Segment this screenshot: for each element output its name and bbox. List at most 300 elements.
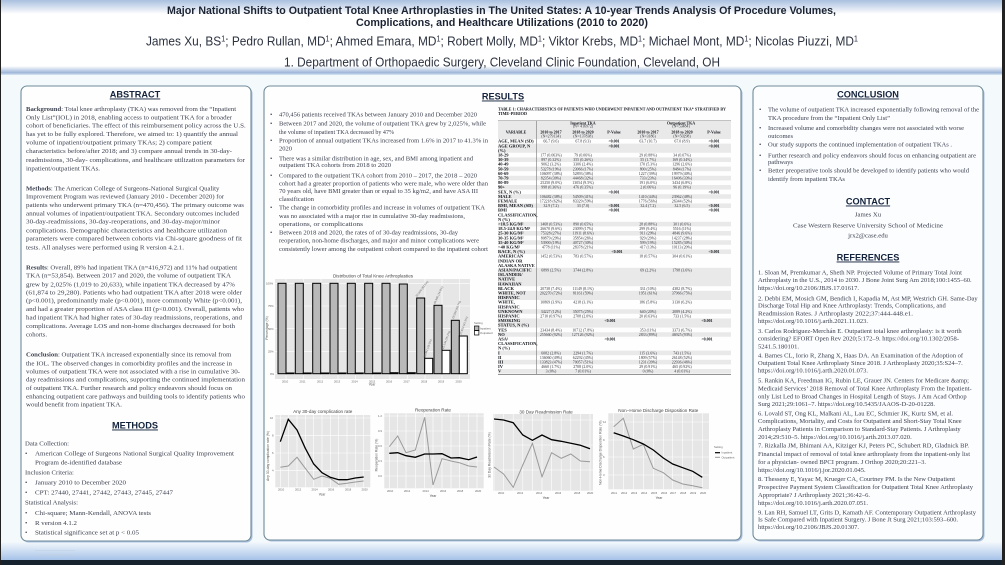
table data values: 417 (13%) bbox=[640, 246, 657, 250]
title: Major National Shifts to Outpatient Total Knee Arthroplasties in The United States: A 10-year Trends Analysis Of Procedure Volumes, bbox=[167, 5, 836, 17]
table row labels: RACE, N (%) bbox=[498, 249, 525, 254]
table data values: 133823 (47%) bbox=[540, 360, 563, 364]
panel: abstract and methods bbox=[21, 86, 252, 542]
authors: ; Pedro Rullan, MD bbox=[225, 34, 326, 48]
axis labels: 2011 bbox=[300, 380, 306, 384]
table header: P-Value bbox=[707, 130, 721, 135]
text block: methods list: • bbox=[25, 480, 27, 487]
table data values: 26670 (9.6%) bbox=[540, 227, 562, 231]
text block: methods summary: annual volumes of inpatient/outpatient TKA. Secondary outcomes included bbox=[26, 210, 240, 217]
axis labels: Year bbox=[656, 496, 663, 500]
axis labels: 2018 bbox=[421, 380, 428, 384]
axis labels: 0.9 bbox=[378, 429, 382, 433]
axis labels: 75% bbox=[268, 304, 274, 308]
table data values: 3 (0%) bbox=[546, 370, 557, 374]
text block: conclusion bullets: Our study supports the continued implementation of outpatient TKAs . bbox=[768, 142, 952, 149]
table header: (N=3186) bbox=[640, 134, 656, 138]
text block: references list: Arthroplasty in the U.S., 2014 to 2030. J Bone Joint Surg Am 2018;100:1455–60. bbox=[758, 277, 972, 284]
table row labels: III bbox=[498, 360, 504, 364]
text block: methods list: • bbox=[25, 451, 27, 458]
table data values: <0.001 bbox=[701, 318, 713, 323]
affiliation: 1. Department of Orthopaedic Surgery, Cleveland Clinic Foundation, Cleveland, OH bbox=[284, 54, 720, 70]
table data values: 83329 (59%) bbox=[573, 200, 594, 204]
text block: key results bullets: Between 2017 and 2020, the volume of outpatient TKA grew by 2,025%, while bbox=[279, 120, 486, 127]
inpatient line bbox=[494, 419, 590, 449]
table row labels: BMI bbox=[498, 208, 507, 213]
axis labels: 0.3 bbox=[378, 459, 382, 463]
table data values: 14237 (28%) bbox=[672, 236, 693, 240]
table row labels: HISPANIC bbox=[498, 314, 520, 318]
axis labels: 2017 bbox=[670, 491, 677, 495]
text block: background: inpatient/outpatient TKAs. bbox=[26, 166, 100, 173]
axis labels: 2020 bbox=[362, 488, 368, 492]
table row labels: 40-49 bbox=[498, 162, 509, 167]
table header: (N=137838) bbox=[573, 134, 593, 138]
table data values: 890 (0.65%) bbox=[573, 222, 593, 226]
axis labels: 8 bbox=[272, 434, 274, 438]
axis labels: 2013 bbox=[334, 380, 341, 384]
text block: contact details bbox=[793, 212, 943, 240]
table data values: 733 (23%) bbox=[640, 176, 657, 180]
table header: (N=50298) bbox=[673, 134, 691, 138]
table data values: 26344 (52%) bbox=[672, 200, 693, 204]
table row labels: BLACK bbox=[498, 286, 515, 291]
text block: references list: Discharge Total Hip and Knee Arthroplasty: Trends, Complications, and bbox=[758, 303, 946, 310]
axis labels: 2012 bbox=[517, 491, 524, 495]
text block: references list: Medicaid Services’ 2018 Removal of Total Knee Arthroplasty From the Inpatient- bbox=[758, 385, 972, 392]
text block: methods summary: complications. Demographic characteristics and healthcare utilization bbox=[26, 227, 228, 234]
text block: references list: 9. Lan RH, Samuel LT, Grits D, Kamath AF. Contemporary Outpatient Arthroplasty bbox=[758, 509, 977, 516]
table data values: 67.8 (9.3) bbox=[575, 140, 591, 144]
text block: methods list: • bbox=[25, 510, 27, 517]
table data values: 52893 (38%) bbox=[573, 172, 594, 176]
table data values: 106482 (38%) bbox=[540, 195, 563, 199]
table data values: 10113 (20%) bbox=[672, 246, 693, 250]
table data values: 3306 (2.4%) bbox=[573, 163, 593, 167]
inpatient line bbox=[389, 453, 477, 460]
table data values: 37966 (75%) bbox=[672, 292, 693, 296]
text block: methods list: Chi-square; Mann-Kendall, ANOVA tests bbox=[35, 510, 151, 517]
bar value labels: 20,633 (41.3%) bbox=[458, 316, 469, 335]
table data values: 136060 (49%) bbox=[540, 356, 563, 360]
text block: key results bullets: 2020 bbox=[279, 145, 293, 152]
text block: methods list bbox=[25, 440, 234, 537]
text block: conclusion bullets: identify from inpatient TKAs bbox=[768, 176, 845, 183]
text block: references list: Outpatient Total Knee Arthroplasty Since 2018. J Arthroplasty 2020;35:S24–7. bbox=[758, 360, 963, 367]
table data values: 4218 (3.1%) bbox=[573, 301, 593, 305]
axis labels: Year bbox=[430, 494, 437, 498]
text block: results summary bbox=[26, 264, 245, 339]
text block: key results bullets: 470,456 patients received TKAs between January 2010 and December 2020 bbox=[279, 111, 478, 118]
table row labels: 90+ bbox=[498, 185, 506, 190]
axis labels: 0% bbox=[270, 372, 275, 376]
table row labels: I bbox=[498, 350, 500, 355]
table row labels: N (%) bbox=[498, 346, 510, 351]
text block: methods list: January 2010 to December 2020 bbox=[35, 480, 127, 487]
table data values: 1296 (2.6%) bbox=[672, 163, 692, 167]
title: Complications, and Healthcare Utilizations (2010 to 2020) bbox=[356, 17, 648, 29]
table data values: 2708 (2.0%) bbox=[573, 365, 593, 369]
bar value labels: 44,900 (74.8%) bbox=[433, 286, 444, 305]
table data values: 32.9 (7.2) bbox=[543, 204, 559, 208]
outpatient line bbox=[280, 457, 364, 484]
line chart legend: Outpatient bbox=[722, 455, 735, 459]
table row labels: CLASSIFICATION, bbox=[498, 212, 538, 217]
table data values: <0.001 bbox=[608, 139, 620, 144]
text block: methods list: • bbox=[25, 520, 27, 527]
table row labels: STATUS, N (%) bbox=[498, 323, 529, 328]
table header: P-Value bbox=[607, 130, 621, 135]
authors: ; Nicolas Piuzzi, MD bbox=[748, 34, 854, 48]
text block: methods list: Statistical significance set at p < 0.05 bbox=[35, 530, 140, 537]
table header: 2010 to 2017 bbox=[637, 130, 659, 135]
table data values: 7 (0.01%) bbox=[575, 370, 591, 374]
table data values: 46925 (93%) bbox=[672, 333, 693, 337]
table row labels: SMOKING bbox=[498, 318, 521, 323]
text block: references list: 2. Debbi EM, Mosich GM, Bendich I, Kapadia M, Ast MP, Westrich GH. Same-Day bbox=[758, 296, 978, 303]
axis labels: Year bbox=[319, 492, 326, 496]
table row labels: IV bbox=[498, 364, 504, 369]
table data values: 733 (1.5%) bbox=[673, 314, 691, 318]
table data values: 170 (5.3%) bbox=[639, 163, 657, 167]
text block: key results bullets: classification bbox=[279, 196, 315, 203]
text block: conclusion bullets: • bbox=[759, 107, 761, 114]
table data values: 53900 (19%) bbox=[541, 241, 562, 245]
table data values: 82354 (30%) bbox=[541, 176, 562, 180]
text block: conclusion summary: day readmissions and complications, supporting the continued implementation bbox=[26, 377, 246, 384]
table data values: 1468 (0.53%) bbox=[540, 222, 562, 226]
table data values: 62292 (45%) bbox=[573, 356, 594, 360]
table data values: 2294 (1.7%) bbox=[573, 351, 593, 355]
table row labels: YES bbox=[498, 327, 507, 332]
text block: references list: 1. Sloan M, Premkumar A, Sheth NP. Projected Volume of Primary Total Joint bbox=[758, 270, 962, 276]
table data values: 75328 (27%) bbox=[541, 232, 562, 236]
table data values: 32.5 (6.5) bbox=[674, 204, 690, 208]
table data values: <0.001 bbox=[608, 208, 620, 213]
table data values: 1410 (44%) bbox=[639, 195, 658, 199]
table row labels: >40 KG/M² bbox=[498, 244, 521, 250]
text block: background: characteristics before/after 2018; and 3) compare annual trends in 30-day- bbox=[26, 148, 232, 155]
axis labels: 2014 bbox=[641, 491, 648, 495]
table data values: 4382 (8.7%) bbox=[672, 287, 692, 291]
text block: conclusion bullets bbox=[759, 107, 979, 183]
text block: methods list: • bbox=[25, 489, 27, 496]
text block: results summary: (p<0.001), predominantly male (p<0.001), more commonly White (p<0.001), bbox=[26, 298, 242, 305]
axis labels: Percentage (%) bbox=[265, 316, 269, 340]
table data values: 16406 (33%) bbox=[672, 176, 693, 180]
text block: conclusion summary: Conclusion: Outpatient TKA increased exponentially since its removal from bbox=[26, 352, 232, 359]
text block: key results bullets bbox=[270, 111, 489, 253]
table data values: <0.001 bbox=[701, 336, 713, 342]
table data values: 25250 (9.0%) bbox=[540, 181, 562, 185]
chart title: 30 Day Readmission Rate bbox=[519, 410, 573, 414]
table data values: 2833 (89%) bbox=[639, 333, 658, 337]
table data values: 127126 (92%) bbox=[572, 333, 595, 337]
table data values: 63.7 (10.7) bbox=[639, 140, 657, 144]
table data values: 3373 (6.7%) bbox=[672, 328, 692, 332]
bar value labels: 15,134 (25.2%) bbox=[441, 330, 451, 350]
authors: 1 bbox=[436, 34, 441, 44]
table data values: <0.001 bbox=[608, 189, 620, 194]
text block: methods list: Program de-identified database bbox=[35, 460, 122, 467]
authors: 1 bbox=[638, 34, 643, 44]
table data values: 35854 (26%) bbox=[573, 236, 594, 240]
axis labels: 2018 bbox=[457, 489, 464, 493]
table data values: 69 (2.2%) bbox=[640, 268, 656, 272]
table row labels: HAWAIIAN bbox=[498, 281, 522, 286]
bar chart: duration of total knee arthroplasties bbox=[265, 274, 493, 386]
table data values: 3434 (6.8%) bbox=[672, 181, 692, 185]
text block: key results bullets: • bbox=[270, 120, 272, 127]
table data values: <0.001 bbox=[708, 203, 720, 208]
text block: key results bullets: operations, or complications bbox=[279, 221, 363, 228]
axis labels: 12 bbox=[603, 420, 607, 424]
axis labels: 2014 bbox=[536, 491, 543, 495]
table data values: 2 (0.06%) bbox=[640, 186, 656, 190]
text block: conclusion summary: volumes of outpatient TKA were not associated with a rise in cumulative 30- bbox=[26, 368, 240, 375]
table row labels: (%) bbox=[498, 148, 506, 153]
axis labels: 0.6 bbox=[378, 444, 382, 448]
axis labels: 4 bbox=[272, 469, 274, 473]
axis labels: 2010 bbox=[498, 491, 505, 495]
table data values: 3744 (2.8%) bbox=[573, 268, 593, 272]
table title bbox=[498, 106, 727, 116]
table data values: 911 (29%) bbox=[640, 232, 657, 236]
text block: background bbox=[26, 106, 246, 173]
axis labels: 0.0 bbox=[378, 474, 382, 478]
table data values: 299 (9.4%) bbox=[639, 227, 657, 231]
table data values: 255660 (92%) bbox=[540, 333, 563, 337]
text block: conclusion summary bbox=[26, 352, 246, 409]
text block: conclusion bullets: • bbox=[759, 152, 761, 159]
bar chart legend: Setting bbox=[474, 321, 483, 325]
text block: contact details: Case Western Reserve University School of Medicine bbox=[793, 222, 943, 229]
table data values: 29 (0.88%) bbox=[639, 154, 657, 158]
axis labels bbox=[374, 414, 482, 498]
table header bbox=[506, 120, 721, 138]
table header: (N=279134) bbox=[541, 134, 561, 138]
table header: 2010 to 2017 bbox=[540, 130, 562, 135]
inpatient bars bbox=[278, 283, 459, 374]
text block: references list: 6. Lovald ST, Ong KL, Malkani AL, Lau EC, Schmier JK, Kurtz SM, et al. bbox=[758, 411, 953, 418]
axis labels: 1.2 bbox=[378, 414, 382, 418]
axis labels bbox=[598, 420, 707, 500]
table row labels: N (%) bbox=[498, 217, 510, 222]
table data values: 20 (0.63%) bbox=[639, 314, 657, 318]
text block: methods list: Statistical Analysis: bbox=[25, 500, 78, 507]
table data values: 11911 (8.6%) bbox=[572, 232, 594, 236]
table row labels: ALASKA NATIVE bbox=[498, 263, 535, 268]
table row labels: BMI, MEAN (SD) bbox=[498, 203, 533, 208]
axis labels bbox=[488, 432, 594, 500]
table data values: 28 (0.88%) bbox=[639, 222, 657, 226]
axis labels: 2014 bbox=[312, 488, 318, 492]
text block: results summary: cohorts. bbox=[26, 332, 47, 339]
table data values: 331 (10%) bbox=[640, 287, 657, 291]
bar chart legend bbox=[474, 321, 493, 335]
axis labels: 2012 bbox=[295, 488, 302, 492]
table data values: 22936 (46%) bbox=[672, 360, 693, 364]
text block: references list: Readmission Rates. J Arthroplasty 2022;37:444-448.e1. bbox=[758, 310, 913, 317]
text block: key results bullets: • bbox=[270, 173, 272, 180]
table data values: <0.001 bbox=[708, 208, 720, 213]
heading: results: RESULTS bbox=[482, 92, 524, 102]
text block: key results bullets: • bbox=[270, 138, 272, 145]
axis labels: 2011 bbox=[611, 491, 617, 495]
table data values: 44468 (32%) bbox=[573, 176, 594, 180]
text block: references list: considering? EFORT Open Rev 2020;5:172–9. https://doi.org/10.1302/2058- bbox=[758, 336, 959, 343]
table data values: <0.001 bbox=[708, 143, 720, 148]
text block: key results bullets: Proportion of annual outpatient TKAs increased from 1.6% in 2017 to 41.3% in bbox=[279, 138, 489, 145]
text block: conclusion bullets: • bbox=[759, 125, 761, 132]
table row labels: ASA¹ bbox=[498, 336, 509, 342]
text block: results summary: and had a greater proportion of ASA class III (p<0.001). Overall, patients who bbox=[26, 306, 245, 313]
table data values: 6899 (2.5%) bbox=[541, 268, 561, 272]
table data values: 67.0 (8.9) bbox=[674, 140, 690, 144]
table row labels: NATIVE bbox=[498, 277, 515, 282]
axis labels: 2012 bbox=[621, 491, 628, 495]
line chart: non-home discharge disposition rate bbox=[598, 408, 709, 500]
text block: references list: https://doi.org/10.2106/JBJS.20.01307. bbox=[758, 524, 859, 531]
axis labels: 2018 bbox=[680, 491, 687, 495]
text block: methods list: • bbox=[25, 530, 27, 537]
table data values: 115 (3.6%) bbox=[639, 351, 657, 355]
text block: key results bullets: • bbox=[270, 205, 272, 212]
table data values: 18 (0.57%) bbox=[639, 255, 657, 259]
bar chart legend: Outpatient bbox=[480, 331, 493, 335]
text block: conclusion bullets: The volume of outpatient TKA increased exponentially following removal of the bbox=[768, 107, 979, 114]
table data values: 998 (0.36%) bbox=[541, 186, 561, 190]
axis labels: 2010 bbox=[387, 489, 394, 493]
text block: references list: https://doi.org/10.1016/j.jor.2020.01.045. bbox=[758, 467, 866, 474]
text block: methods list: Data Collection: bbox=[25, 440, 69, 447]
line chart: reoperation rate bbox=[374, 408, 484, 498]
axis labels: 6 bbox=[603, 455, 605, 459]
table data values: 9062 (3.2%) bbox=[541, 163, 561, 167]
table data values: 304 (0.61%) bbox=[672, 255, 692, 259]
table data values: 40727 (30%) bbox=[573, 241, 594, 245]
axis labels: 2020 bbox=[475, 489, 482, 493]
table data values: 33 (7.0) bbox=[577, 204, 590, 208]
text block: references list: https://doi.org/10.1016/j.arth.2021.11.023. bbox=[758, 318, 868, 325]
axis labels: Reoperation Rate (%) bbox=[374, 439, 378, 471]
table row labels: CLASSIFICATION, bbox=[498, 341, 538, 346]
text block: methods summary: Methods: The American College of Surgeons-National Surgical Quality bbox=[26, 185, 220, 192]
authors: ; Viktor Krebs, MD bbox=[542, 34, 638, 48]
table data values: 1951 (61%) bbox=[639, 292, 658, 296]
authors: 1 bbox=[854, 34, 858, 44]
line chart: any 30-day complication rate bbox=[266, 409, 370, 496]
table data values: 202270 (72%) bbox=[540, 292, 563, 296]
text block: conclusion bullets: • bbox=[759, 168, 761, 175]
text block: methods list: R version 4.1.2 bbox=[35, 520, 77, 527]
axis labels: 2013 bbox=[631, 491, 638, 495]
table data values: 35075 (25%) bbox=[573, 310, 594, 314]
table data values: 19979 (40%) bbox=[672, 172, 693, 176]
table data values: 172218 (62%) bbox=[540, 200, 563, 204]
table data values: 783 (0.57%) bbox=[573, 255, 593, 259]
heading: conclusion: CONCLUSION bbox=[837, 90, 899, 100]
chart title: Any 30-day complication rate bbox=[293, 409, 353, 414]
line chart: 30 day readmission rate bbox=[488, 410, 594, 500]
text block: methods summary: Improvement Program was reviewed (January 2010 - December 2020) for bbox=[26, 194, 225, 201]
table data values: 301 (0.6%) bbox=[673, 222, 691, 226]
table data values: <0.001 bbox=[708, 249, 720, 254]
chart title: Non−Home Discharge Disposition Rate bbox=[618, 408, 699, 413]
axis labels: 2018 bbox=[345, 488, 352, 492]
text block: key results bullets: cohort had a greater proportion of patients who were male, who were older than bbox=[279, 180, 489, 187]
axis labels: 2014 bbox=[422, 489, 429, 493]
table data values: <0.001 bbox=[708, 189, 720, 194]
table row labels: V bbox=[498, 369, 502, 374]
table data values: 169 (0.34%) bbox=[672, 158, 692, 162]
text block: methods summary: 30-day-readmissions, 30-day-reoperations, and 30-day-major/minor bbox=[26, 219, 221, 226]
table data values: 353 (11%) bbox=[640, 328, 657, 332]
table row labels: 80-89 bbox=[498, 180, 509, 185]
text block: references list: Surg 2021;29:1061–7. https://doi.org/10.5435/JAAOS-D-20-01228. bbox=[758, 401, 935, 408]
authors: ; Robert Molly, MD bbox=[441, 34, 538, 48]
text block: methods summary: tests. All analyses were performed using R version 4.2.1. bbox=[26, 245, 184, 252]
text block: results summary: Results: Overall, 89% had inpatient TKA (n=416,972) and 11% had outpatient bbox=[26, 264, 237, 271]
text block: key results bullets: • bbox=[270, 230, 272, 237]
axis labels: 30 Day Readmission Rate (%) bbox=[488, 432, 492, 478]
axis labels: 2016 bbox=[440, 489, 447, 493]
table row shading bbox=[498, 120, 731, 375]
table data values: 29 (0.91%) bbox=[639, 365, 657, 369]
text block: references list: 5. Rankin KA, Freedman IG, Rubin LE, Grauer JN. Centers for Medicare &amp; bbox=[758, 377, 969, 384]
text block: contact details: jrx2@case.edu bbox=[847, 233, 889, 240]
table data values: 23434 (8.4%) bbox=[540, 328, 562, 332]
text block: conclusion bullets: TKA procedure from the “Inpatient Only List” bbox=[768, 115, 890, 122]
axis labels: 2016 bbox=[555, 491, 562, 495]
table data values: 34227 (12%) bbox=[541, 310, 562, 314]
text block: background: Only List”(IOL) in 2018, enabling access to outpatient TKA for a broader bbox=[26, 114, 233, 121]
table data values: <0.001 bbox=[604, 336, 616, 342]
text block: key results bullets: reoperation, non-home discharges, and major and minor complications were bbox=[279, 238, 479, 245]
table data values bbox=[540, 139, 720, 374]
table data values: 2710 (0.97%) bbox=[540, 314, 562, 318]
heading: methods: METHODS bbox=[112, 420, 158, 430]
table row labels bbox=[498, 139, 538, 374]
table row labels: WHITE, NOT bbox=[498, 290, 526, 296]
text block: references list: Financial impact of removal of total knee arthroplasty from the inpatient-only list bbox=[758, 451, 970, 458]
table row labels: SEX, N (%) bbox=[498, 189, 521, 194]
table data values: 53278 (19%) bbox=[541, 167, 562, 171]
axis labels: 2010 bbox=[278, 488, 285, 492]
text block: results summary: (61,874 to 29,280). Patients who had outpatient TKA after 2018 were older bbox=[26, 290, 243, 297]
panel: conclusion, contact and references bbox=[753, 86, 984, 542]
axis labels: 10 bbox=[270, 416, 274, 420]
table row labels: ASIAN/PACIFIC bbox=[498, 268, 532, 272]
table data values: 66.7 (9.6) bbox=[543, 140, 559, 144]
line chart legend: Setting bbox=[714, 445, 723, 449]
table data values: 476 (0.35%) bbox=[573, 186, 593, 190]
table data values: 23099 (17%) bbox=[573, 227, 594, 231]
text block: background: readmissions, 30-day- complications, and healthcare utilization parameters for bbox=[26, 157, 246, 164]
table data values: 640 (20%) bbox=[640, 310, 657, 314]
axis labels: 2016 bbox=[328, 488, 335, 492]
text block: background: Background: Total knee arthroplasty (TKA) was removed from the “Inpatient bbox=[26, 106, 236, 113]
table header: (N=53484) bbox=[672, 125, 690, 129]
table data values: <0.001 bbox=[604, 318, 616, 323]
table data values: 10712 (7.8%) bbox=[572, 328, 594, 332]
text block: conclusion summary: would benefit from inpatient TKA. bbox=[26, 402, 122, 409]
text block: key results bullets: was no associated with a major rise in cumulative 30-day readmissions, bbox=[279, 213, 465, 220]
axis labels: 2019 bbox=[690, 491, 697, 495]
heading: contact: CONTACT bbox=[846, 196, 890, 206]
table: patient characteristics bbox=[498, 106, 731, 375]
table data values: 3130 (6.2%) bbox=[672, 301, 692, 305]
